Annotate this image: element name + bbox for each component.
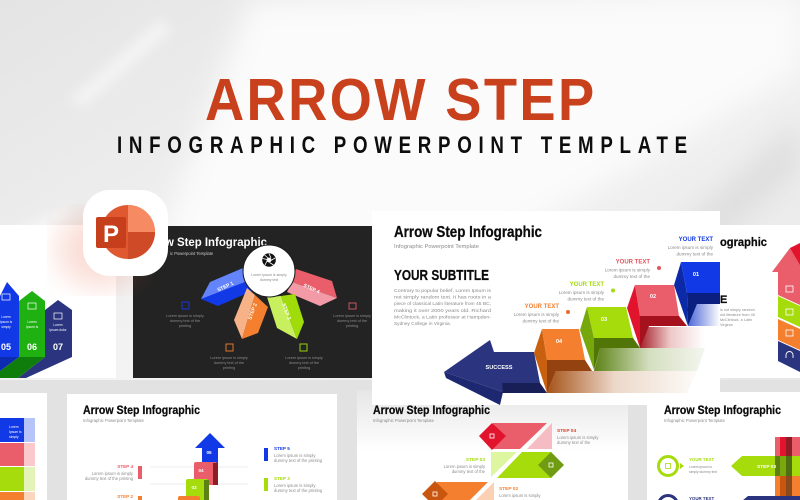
callout: centre circle [243,245,295,297]
text block: step 1 note: Lorem ipsum is simply [166,314,204,318]
step 02 [627,285,715,348]
text block: arrow 05: Ipsum is [0,320,12,324]
panel: bottom right slide: Lorem ipsum is [689,465,712,469]
arrow: step 1 [201,268,252,306]
text block: step 03: dummy text of the [452,469,486,474]
text block: arrow 05: Lorem [27,320,37,324]
icon: up arrow step 05 [195,433,225,463]
text block: step 5 and step 3: STEP 5 [274,446,290,451]
arrow: success [444,340,547,405]
text block: step 2 note [210,356,248,370]
heading: main slide title: Arrow Step Infographic [394,224,542,241]
arrow: step 4 [287,269,337,306]
heading: slide title: Arrow Step Infographic [664,404,781,417]
arrow: success: SUCCESS [485,365,513,371]
step 04: 04 [556,339,563,345]
text block: body paragraph: Contrary to popular belief, Lorem Ipsum is [394,288,492,293]
text block: step 04: dummy text of the [557,440,591,445]
icon: pink camera [349,303,356,309]
text block: step 5 and step 3: Lorem ipsum is simply [274,453,316,458]
text block: green label [559,282,605,302]
panel: right slide: is not simply random [720,308,755,312]
arrow: step 1: STEP 1 [217,281,235,293]
text block: step 5 and step 3 [274,446,323,493]
panel: bottom slide with up arrow steps: Infographic Powerpoint Template [83,418,145,423]
heading: your subtitle: YOUR SUBTITLE [394,268,489,284]
panel: right slide: E [720,294,727,306]
text block: body paragraph: not simply random text. It has roots in a [394,295,492,300]
icon: green diamond [538,452,564,478]
step 01: 01 [693,272,699,278]
panel: right slide: old literature from 45 [720,313,755,317]
text block: step 4 note [333,314,371,328]
text block: body paragraph: McClintock, a Latin professor at Hampden- [394,314,492,319]
text block: step 04 [557,428,599,445]
panel: bottom right slide: YOUR TEXT [689,457,714,462]
text block: arrow 05: Lorem [1,315,11,319]
text block: blue label: dummy text of the [676,252,713,256]
icon: PowerPoint logo [56,190,168,288]
callout: centre circle: dummy text [260,278,278,282]
text block: step 03: Lorem ipsum is simply [444,464,486,469]
panel: left slide with numbered arrows [0,225,116,378]
icon: green play [300,344,307,351]
text block: orange label: YOUR TEXT [525,304,559,310]
text block: red label [605,260,651,279]
chart: crossing bands [731,437,800,500]
panel: bottom right slide [647,392,800,500]
step 03: 03 [601,317,607,323]
icon: blue square [182,302,189,309]
step 02: 02 [650,294,656,300]
panel: bottom right slide: simply dummy text [689,470,717,474]
icon: orange box [226,344,233,351]
text block: step 4 [85,464,134,499]
callout: centre circle: Lorem ipsum is simply [251,273,287,277]
text block: step 1 note [166,314,204,328]
text block: step 4: STEP 2 [117,494,133,499]
text block: blue label: Lorem ipsum is simply [668,245,714,250]
text block: step 3 note: dummy text of the [289,361,319,365]
text block: green label: YOUR TEXT [570,282,604,288]
text block: body paragraph [394,288,492,326]
text block: step 02 [499,487,540,498]
panel: bottom slide with diagonal steps: Infographic Powerpoint Template [373,418,435,423]
heading: right slide title fragment: ographic [720,236,768,249]
panel: dark slide with petal arrows [133,226,372,378]
text block: step 5 and step 3: dummy text of the printing [274,458,323,463]
text block: step 2 note: Lorem ipsum is simply [210,356,248,360]
text block: step 03: STEP 03 [466,457,485,463]
text block: step 02: STEP 02 [499,486,518,492]
text block: arrow 05: Lorem [53,323,63,327]
icon: red diamond [479,423,506,450]
text block: orange label [514,304,560,324]
arrow: stacked house arrow [772,243,800,372]
heading: dark slide title: ow Step Infographic [158,236,268,249]
text block: step 4 note: dummy text of the [337,319,367,323]
arrow: step 2 [234,288,268,339]
panel: bottom left slide: simply [9,435,19,439]
text block: green label: dummy text of the [567,296,604,302]
text block: blue label: YOUR TEXT [679,237,713,243]
text block: step 2 note: printing [223,366,235,370]
text block: red label: dummy text of the [613,274,650,279]
text block: step 4 note: Lorem ipsum is simply [333,314,371,318]
text block: step 1 note: dummy text of the [170,319,200,323]
text block: step 3 note: Lorem ipsum is simply [285,356,323,360]
panel: dark slide with petal arrows: ic Powerpoint Template [170,251,214,256]
panel: right slide: McClintock, a Latin [720,318,752,322]
text block: step 5 and step 3: Lorem ipsum is simply [274,483,316,488]
text block: arrow 05 [0,294,68,352]
icon: orange diamond [422,481,448,500]
icon: aperture [262,253,276,267]
icon: up arrow step 05: 05 [206,450,212,455]
panel: right slide: Virginia [720,323,733,327]
arrow: step 2: STEP 2 [247,302,259,321]
panel: bottom slide with diagonal steps [357,390,628,500]
heading: slide title: Arrow Step Infographic [83,404,200,417]
chart: 3D arrow staircase [444,262,720,405]
text block: body paragraph: piece of classical Latin literature from 45 BC, [394,301,491,306]
panel: bottom right slide: Infographic Powerpoint Template [664,418,726,423]
panel: bottom left slide: Ipsum is [9,430,22,434]
text block: arrow 05: 05 [1,342,11,352]
heading: slide title: Arrow Step Infographic [373,404,490,417]
panel: main featured slide [372,211,720,405]
text block: arrow 05: Ipsum is [26,325,38,329]
panel: right slide [720,225,800,378]
text block: orange label: dummy text of the [522,318,559,324]
chart: crossing bands: STEP 03 [757,464,776,470]
panel: bottom left slide [0,393,47,500]
text block: step 4 note: printing [346,324,358,328]
text block: red label: YOUR TEXT [616,260,650,266]
panel: bottom slide with up arrow steps [67,394,337,500]
text block: step 1 note: printing [179,324,191,328]
step 04 [534,329,697,393]
heading: infographic powerpoint template: INFOGRAPHIC POWERPOINT TEMPLATE [117,132,687,159]
arrow: step 4: STEP 4 [302,283,321,295]
step 01 [674,262,720,326]
arrow: step 3: STEP 3 [280,303,292,321]
text block: step 03 [444,457,486,474]
step 03 [580,307,705,371]
text block: main slide subtitle: Infographic Powerpoint Template [394,244,479,250]
text block: step 5 and step 3: dummy text of the printing [274,488,323,493]
text block: step 4: dummy text of the printing [85,476,134,481]
text block: step 04: Lorem ipsum is simply [557,435,599,440]
text block: green label: Lorem ipsum is simply [559,290,605,295]
text block: arrow 05: 06 [27,342,37,352]
heading: ARROW STEP: ARROW STEP [205,68,594,134]
text block: arrow 05: Ipsum dolor [49,328,68,332]
panel: bottom slide with up arrow steps: 04 [198,468,204,473]
text block: arrow 05: 07 [53,342,63,352]
text block: step 04: STEP 04 [557,428,576,434]
text block: step 4: Lorem ipsum is simply [92,471,134,476]
text block: blue label [668,237,714,256]
text block: step 02: Lorem ipsum is simply [499,493,541,498]
icon: PowerPoint logo: P [103,221,119,248]
icon: green ring [658,456,684,476]
text block: orange label: Lorem ipsum is simply [514,312,560,317]
arrow: step 3 [267,294,304,339]
text block: step 4: STEP 4 [117,464,133,469]
text block: red label: Lorem ipsum is simply [605,268,651,272]
text block: body paragraph: making it over 2000 years old. Richard [394,308,492,313]
text block: step 3 note [285,356,323,370]
text block: step 3 note: printing [298,366,310,370]
panel: bottom slide with up arrow steps: 03 [191,485,197,490]
text block: step 5 and step 3: STEP 3 [274,476,290,481]
text block: arrow 05: simply [1,325,11,329]
text block: body paragraph: Sydney College in Virginia. [394,321,451,326]
text block: step 2 note: dummy text of the [214,361,244,365]
panel: bottom left slide: Lorem [9,425,19,429]
